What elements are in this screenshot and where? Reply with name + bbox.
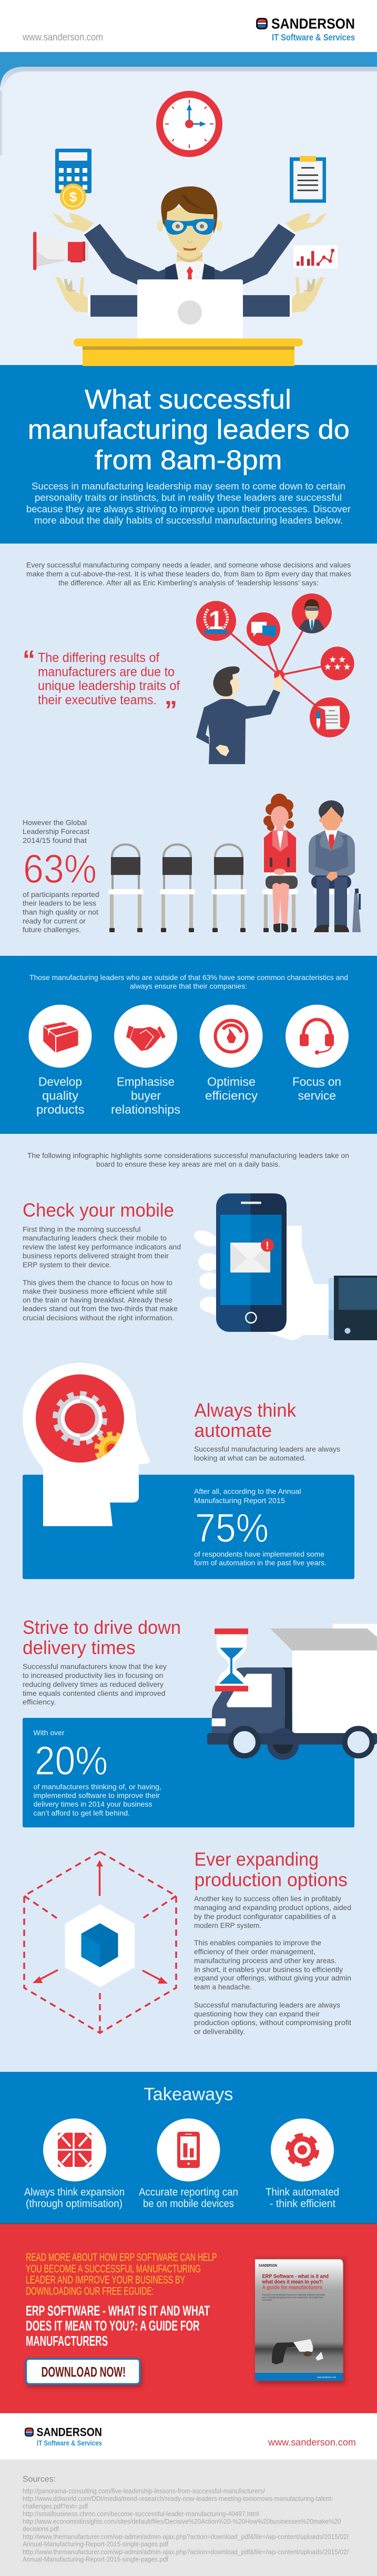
panel: takeaways bbox=[0, 2072, 377, 2224]
body text: to increased productivity lies in focusing on bbox=[23, 1671, 163, 1680]
quote: unique leadership traits of bbox=[38, 679, 180, 693]
intro text bbox=[26, 561, 351, 587]
icon: mobile reporting bbox=[157, 2119, 220, 2182]
blue stat box: 75 percent bbox=[23, 1475, 354, 1579]
icon: expansion arrows bbox=[43, 2119, 106, 2182]
label: emphasise buyer relationships: buyer bbox=[131, 1089, 161, 1102]
source links: Annual-Manufacturing-Report-2015-single-pages.pdf bbox=[23, 2541, 168, 2548]
label: develop quality products: Develop bbox=[38, 1075, 82, 1089]
blue stat box: 75 percent: of respondents have implemented some bbox=[194, 1550, 324, 1558]
Sanderson logo bbox=[25, 2426, 102, 2447]
heading: Ever expanding bbox=[195, 1849, 319, 1870]
body text: ERP system to their device. bbox=[23, 1260, 111, 1269]
Sanderson logo: SANDERSON bbox=[37, 2426, 102, 2439]
panel: title bbox=[0, 365, 377, 544]
icon: calculator and coin bbox=[55, 149, 91, 210]
ebook cover: SANDERSON bbox=[259, 2264, 277, 2268]
body text: by the product configurator capabilities of a bbox=[194, 1912, 336, 1921]
Sanderson logo bbox=[256, 16, 355, 43]
main title: manufacturing leaders do bbox=[28, 415, 350, 445]
icon: stars bbox=[321, 646, 354, 680]
ebook cover: what does it mean to you?: bbox=[262, 2279, 323, 2285]
empty chair bbox=[160, 844, 195, 932]
panel: daily habits bbox=[0, 1134, 377, 2072]
source links bbox=[23, 2487, 349, 2563]
body text bbox=[23, 1225, 181, 1322]
body text: team a headache. bbox=[194, 1983, 252, 1991]
label: emphasise buyer relationships bbox=[111, 1075, 180, 1117]
body text: crucial decisions without the right information. bbox=[23, 1313, 174, 1322]
label: develop quality products bbox=[36, 1075, 84, 1117]
heading bbox=[195, 1849, 348, 1891]
stat: 63 percent: ready for current or bbox=[23, 917, 86, 925]
stat: 63 percent: Leadership Forecast bbox=[23, 827, 89, 836]
blue stat box: 75 percent: form of automation in the past five years. bbox=[194, 1559, 327, 1567]
heading: automate bbox=[195, 1420, 272, 1441]
icon: megaphone bbox=[33, 232, 88, 276]
empty chair bbox=[108, 844, 144, 932]
arrow: down right bbox=[142, 1970, 168, 1984]
blue stat box: 20 percent: implemented software to improve their bbox=[34, 1791, 160, 1799]
body text: production options, without compromising profit bbox=[194, 2018, 351, 2027]
heading: delivery times bbox=[23, 1636, 136, 1658]
label: accurate reporting bbox=[139, 2187, 238, 2209]
source links: http://www.themanufacturer.com/wp-admin/admin-ajax.php?action=download_pdf&file=/wp-content/uploads/2015/02/ bbox=[23, 2533, 349, 2540]
body text bbox=[194, 1894, 351, 2036]
intro paragraph: because they are always striving to improve upon their processes. Discover bbox=[26, 503, 351, 515]
body text: Successful manufacturing leaders are always bbox=[194, 1445, 340, 1453]
label: optimise efficiency: Optimise bbox=[207, 1075, 256, 1089]
stat: 63 percent: of participants reported bbox=[23, 890, 99, 899]
main title bbox=[28, 384, 350, 476]
stat: 63 percent: However the Global bbox=[23, 818, 87, 827]
label: always think expansion bbox=[24, 2187, 125, 2209]
illustration: leader pointing at network bbox=[196, 593, 354, 764]
Sanderson logo: SANDERSON bbox=[271, 16, 355, 32]
stat: 63 percent: 63% bbox=[23, 847, 97, 892]
lead text: LEADER AND IMPROVE YOUR BUSINESS BY bbox=[26, 2274, 185, 2286]
body text: managing and expanding product options, aided bbox=[194, 1903, 351, 1912]
footer bbox=[0, 2413, 377, 2459]
sources heading: Sources: bbox=[23, 2475, 56, 2484]
hero panel bbox=[0, 52, 377, 366]
body text: time equals contented clients and improved bbox=[23, 1689, 166, 1697]
body text bbox=[194, 1445, 340, 1462]
section: delivery times bbox=[23, 1616, 377, 1828]
ebook cover: your manufacturing business more responsive and agile than bbox=[262, 2296, 323, 2299]
website address: www.sanderson.com bbox=[22, 32, 103, 43]
blue stat box: 20 percent: 20% bbox=[35, 1738, 108, 1784]
intro text: always ensure that their companies: bbox=[130, 982, 247, 990]
label: focus on service bbox=[292, 1075, 341, 1102]
guide title: ERP SOFTWARE - WHAT IS IT AND WHAT bbox=[26, 2303, 210, 2319]
button: download now bbox=[26, 2359, 142, 2387]
arrow: down left bbox=[33, 1970, 58, 1983]
icon: laptop bbox=[137, 279, 243, 339]
panel: leadership traits bbox=[0, 544, 377, 956]
stat: 63 percent: their leaders to be less bbox=[23, 899, 96, 908]
guide title bbox=[26, 2303, 210, 2349]
intro text: the difference. After all as Eric Kimberling’s analysis of ‘leadership lessons’ says: bbox=[58, 579, 319, 587]
intro text: Those manufacturing leaders who are outside of that 63% have some common characteristics and bbox=[29, 973, 348, 982]
illustration: delivery truck bbox=[207, 1624, 377, 1760]
quote: ” bbox=[165, 696, 177, 724]
section: check your mobile bbox=[23, 1193, 377, 1340]
empty chair bbox=[211, 844, 247, 932]
icon: executive portrait bbox=[292, 593, 332, 635]
icon: headset bbox=[286, 1005, 349, 1068]
lead text: YOU BECOME A SUCCESSFUL MANUFACTURING bbox=[26, 2263, 201, 2275]
blue stat box: 20 percent: delivery times in 2014 your business bbox=[34, 1800, 152, 1808]
blue stat box: 75 percent: Manufacturing Report 2015 bbox=[194, 1496, 285, 1505]
guide title: MANUFACTURERS bbox=[26, 2333, 108, 2349]
icon: handshake bbox=[114, 1005, 177, 1068]
button: download now: DOWNLOAD NOW! bbox=[42, 2364, 126, 2380]
ebook cover: ERP Software - what is it and bbox=[262, 2273, 329, 2279]
panel: download call to action bbox=[0, 2223, 377, 2413]
heading: Strive to drive down bbox=[23, 1616, 181, 1638]
icon: chart bbox=[293, 245, 338, 268]
blue stat box: 20 percent: of manufacturers thinking of, or having, bbox=[34, 1782, 161, 1791]
icon: calculator and coin: $ bbox=[69, 189, 77, 205]
source links: http://www.themanufacturer.com/wp-admin/admin-ajax.php?action=download_pdf&file=/wp-content/uploads/2015/02/ bbox=[23, 2548, 349, 2556]
blue stat box: 75 percent: 75% bbox=[195, 1506, 269, 1551]
ebook cover bbox=[255, 2257, 345, 2384]
blue stat box: 20 percent: With over bbox=[34, 1728, 65, 1737]
main title: What successful bbox=[85, 384, 291, 415]
Sanderson logo: IT Software & Services bbox=[272, 32, 355, 43]
panel: common characteristics bbox=[0, 956, 377, 1134]
quote: “ bbox=[23, 646, 35, 674]
intro text: board to ensure these key areas are met on a daily basis. bbox=[96, 1160, 280, 1168]
intro text: The following infographic highlights some considerations successful manufacturing leaders take on bbox=[27, 1151, 349, 1160]
header bar bbox=[0, 0, 377, 52]
body text: or deliverability. bbox=[194, 2027, 245, 2036]
label: focus on service: service bbox=[298, 1089, 336, 1102]
lead text: READ MORE ABOUT HOW ERP SOFTWARE CAN HELP bbox=[26, 2251, 217, 2264]
icon: number one award bbox=[196, 601, 236, 641]
lead text: DOWNLOADING OUR FREE EGUIDE: bbox=[26, 2285, 154, 2297]
body text: manufacturing process and other key areas. bbox=[194, 1956, 337, 1965]
label: optimise efficiency: efficiency bbox=[205, 1089, 258, 1102]
icon: hourglass bbox=[215, 1629, 248, 1692]
label: accurate reporting: be on mobile devices bbox=[143, 2198, 234, 2209]
quote: their executive teams. bbox=[38, 693, 157, 707]
section: production options bbox=[24, 1849, 351, 2036]
icon: envelope: ! bbox=[266, 1240, 269, 1252]
intro text: Every successful manufacturing company needs a leader, and someone whose decisions and values bbox=[26, 561, 351, 569]
body text: modern ERP system. bbox=[194, 1921, 261, 1930]
icon: box bbox=[28, 1005, 91, 1068]
body text: This enables companies to improve the bbox=[194, 1938, 321, 1947]
icon: clock bbox=[156, 91, 222, 157]
icon: gauge bbox=[200, 1005, 263, 1068]
lead text bbox=[26, 2251, 217, 2297]
Sanderson logo: IT Software & Services bbox=[37, 2439, 102, 2447]
body text: business reports delivered straight from their bbox=[23, 1252, 169, 1260]
intro paragraph: more about the daily habits of successful manufacturing leaders below. bbox=[34, 515, 343, 526]
heading: production options bbox=[195, 1869, 348, 1891]
body text: First thing in the morning successful bbox=[23, 1225, 141, 1233]
body text: manufacturing leaders check their mobile to bbox=[23, 1234, 167, 1242]
guide title: DOES IT MEAN TO YOU?: A GUIDE FOR bbox=[26, 2318, 200, 2334]
heading bbox=[23, 1616, 181, 1658]
body text: Successful manufacturers know that the key bbox=[23, 1662, 167, 1671]
stat: 63 percent: future challenges. bbox=[23, 925, 81, 934]
quote: manufacturers are due to bbox=[38, 664, 175, 679]
ebook cover: ever before. bbox=[262, 2299, 272, 2301]
icon: document and pen bbox=[310, 697, 350, 737]
body text: Another key to success often lies in profitably bbox=[194, 1894, 341, 1903]
stat: 63 percent bbox=[23, 818, 99, 934]
source links: Annual-Manufacturing-Report-2015-single-pages.pdf bbox=[23, 2556, 168, 2563]
intro paragraph: Success in manufacturing leadership may seem to come down to certain bbox=[32, 481, 345, 492]
body text: This gives them the chance to focus on how to bbox=[23, 1278, 172, 1287]
quote bbox=[23, 646, 180, 724]
main title: from 8am-8pm bbox=[95, 445, 282, 476]
arrow: up bbox=[96, 1860, 103, 1896]
blue stat box: 75 percent: After all, according to the Annual bbox=[194, 1487, 301, 1496]
blue stat box: 20 percent bbox=[23, 1718, 354, 1828]
intro text: make them a cut-above-the-rest. It is what these leaders do, from 8am to 8pm every day that makes bbox=[26, 570, 351, 578]
source links: http://www.economistinsights.com/sites/default/files/Decisive%20Action%20-%20How%20businesses%20make%20 bbox=[23, 2518, 341, 2525]
label: emphasise buyer relationships: Emphasise bbox=[117, 1075, 175, 1089]
source links: http://panorama-consulting.com/five-leadership-lessons-from-successful-manufacturers/ bbox=[23, 2487, 265, 2495]
section: always think automate bbox=[23, 1363, 340, 1526]
label: accurate reporting: Accurate reporting can bbox=[139, 2187, 238, 2198]
source links: http://smallbusiness.chron.com/become-successful-leader-manufacturing-40497.html bbox=[23, 2510, 259, 2518]
body text: In short, it enables your business to efficiently bbox=[194, 1965, 343, 1974]
icon: number one award: 1 bbox=[209, 606, 223, 635]
body text: leaders stand out from the two-thirds that make bbox=[23, 1305, 178, 1313]
panel: sources bbox=[0, 2459, 377, 2576]
heading: Takeaways bbox=[144, 2084, 233, 2104]
source links: http://www.ddiworld.com/DDI/media/trend-research/ready-now-leaders-meeting-tomorrows-manufacturing-talent- bbox=[23, 2495, 333, 2502]
label: think automated bbox=[266, 2187, 339, 2209]
ebook cover: www.sanderson.com bbox=[317, 2376, 336, 2379]
body text: looking at what can be automated. bbox=[194, 1454, 306, 1462]
illustration: expanding cube bbox=[24, 1852, 176, 2033]
illustration: head with gears bbox=[23, 1363, 150, 1526]
body text: on the train or having breakfast. Already these bbox=[23, 1296, 172, 1304]
quote: The differing results of bbox=[38, 651, 159, 665]
stat: 63 percent: 2014/15 found that bbox=[23, 836, 87, 844]
heading: Check your mobile bbox=[23, 1200, 174, 1221]
chairs illustration bbox=[108, 794, 361, 932]
illustration: hand holding phone bbox=[192, 1193, 377, 1340]
label: optimise efficiency bbox=[205, 1075, 258, 1102]
label: emphasise buyer relationships: relationships bbox=[111, 1103, 180, 1117]
intro paragraph bbox=[26, 481, 351, 526]
body text: questioning how they can expand their bbox=[194, 2009, 320, 2018]
icon: clipboard bbox=[290, 156, 326, 203]
icon: gear bbox=[271, 2119, 334, 2182]
label: focus on service: Focus on bbox=[292, 1075, 341, 1089]
body text: efficiency of their order management, bbox=[194, 1947, 315, 1956]
icon: envelope bbox=[230, 1238, 274, 1273]
stat: 63 percent: than high quality or not bbox=[23, 908, 98, 916]
label: develop quality products: quality bbox=[42, 1089, 79, 1102]
body text bbox=[23, 1662, 167, 1706]
website address: www.sanderson.com bbox=[268, 2437, 356, 2447]
label: develop quality products: products bbox=[36, 1103, 84, 1117]
illustration: desk bbox=[74, 338, 303, 366]
icon: chat bubbles bbox=[247, 612, 280, 646]
label: always think expansion: Always think expansion bbox=[24, 2187, 125, 2198]
body text: make their business more efficient while still bbox=[23, 1287, 167, 1295]
label: always think expansion: (through optimisation) bbox=[26, 2198, 123, 2209]
ebook cover: A guide for manufacturers bbox=[262, 2285, 322, 2291]
body text: efficiency. bbox=[23, 1697, 56, 1706]
body text: review the latest key performance indicators and bbox=[23, 1243, 181, 1251]
seated man bbox=[309, 800, 361, 932]
seated woman bbox=[262, 794, 298, 932]
label: think automated: - think efficient bbox=[270, 2198, 335, 2209]
blue stat box: 20 percent: can’t afford to get left behind. bbox=[34, 1809, 130, 1817]
ebook cover: Discover how Enterprise Resource Planning software will make bbox=[262, 2293, 325, 2296]
body text: expand your offerings, without giving your admin bbox=[194, 1974, 351, 1982]
intro paragraph: personality traits or instincts, but in reality these leaders are successful bbox=[35, 492, 342, 503]
heading: Always think bbox=[195, 1399, 297, 1421]
label: think automated: Think automated bbox=[266, 2187, 339, 2198]
body text: reducing delivery times as reduced delivery bbox=[23, 1680, 164, 1688]
intro text bbox=[29, 973, 348, 990]
illustration: leader with many arms bbox=[53, 186, 327, 317]
source links: challenges.pdf?ext=.pdf bbox=[23, 2503, 88, 2510]
body text: Successful manufacturing leaders are always bbox=[194, 2000, 340, 2009]
figure: man in suit from behind bbox=[196, 666, 283, 764]
heading bbox=[195, 1399, 297, 1441]
intro text bbox=[27, 1151, 349, 1168]
source links: decisions.pdf bbox=[23, 2526, 59, 2533]
